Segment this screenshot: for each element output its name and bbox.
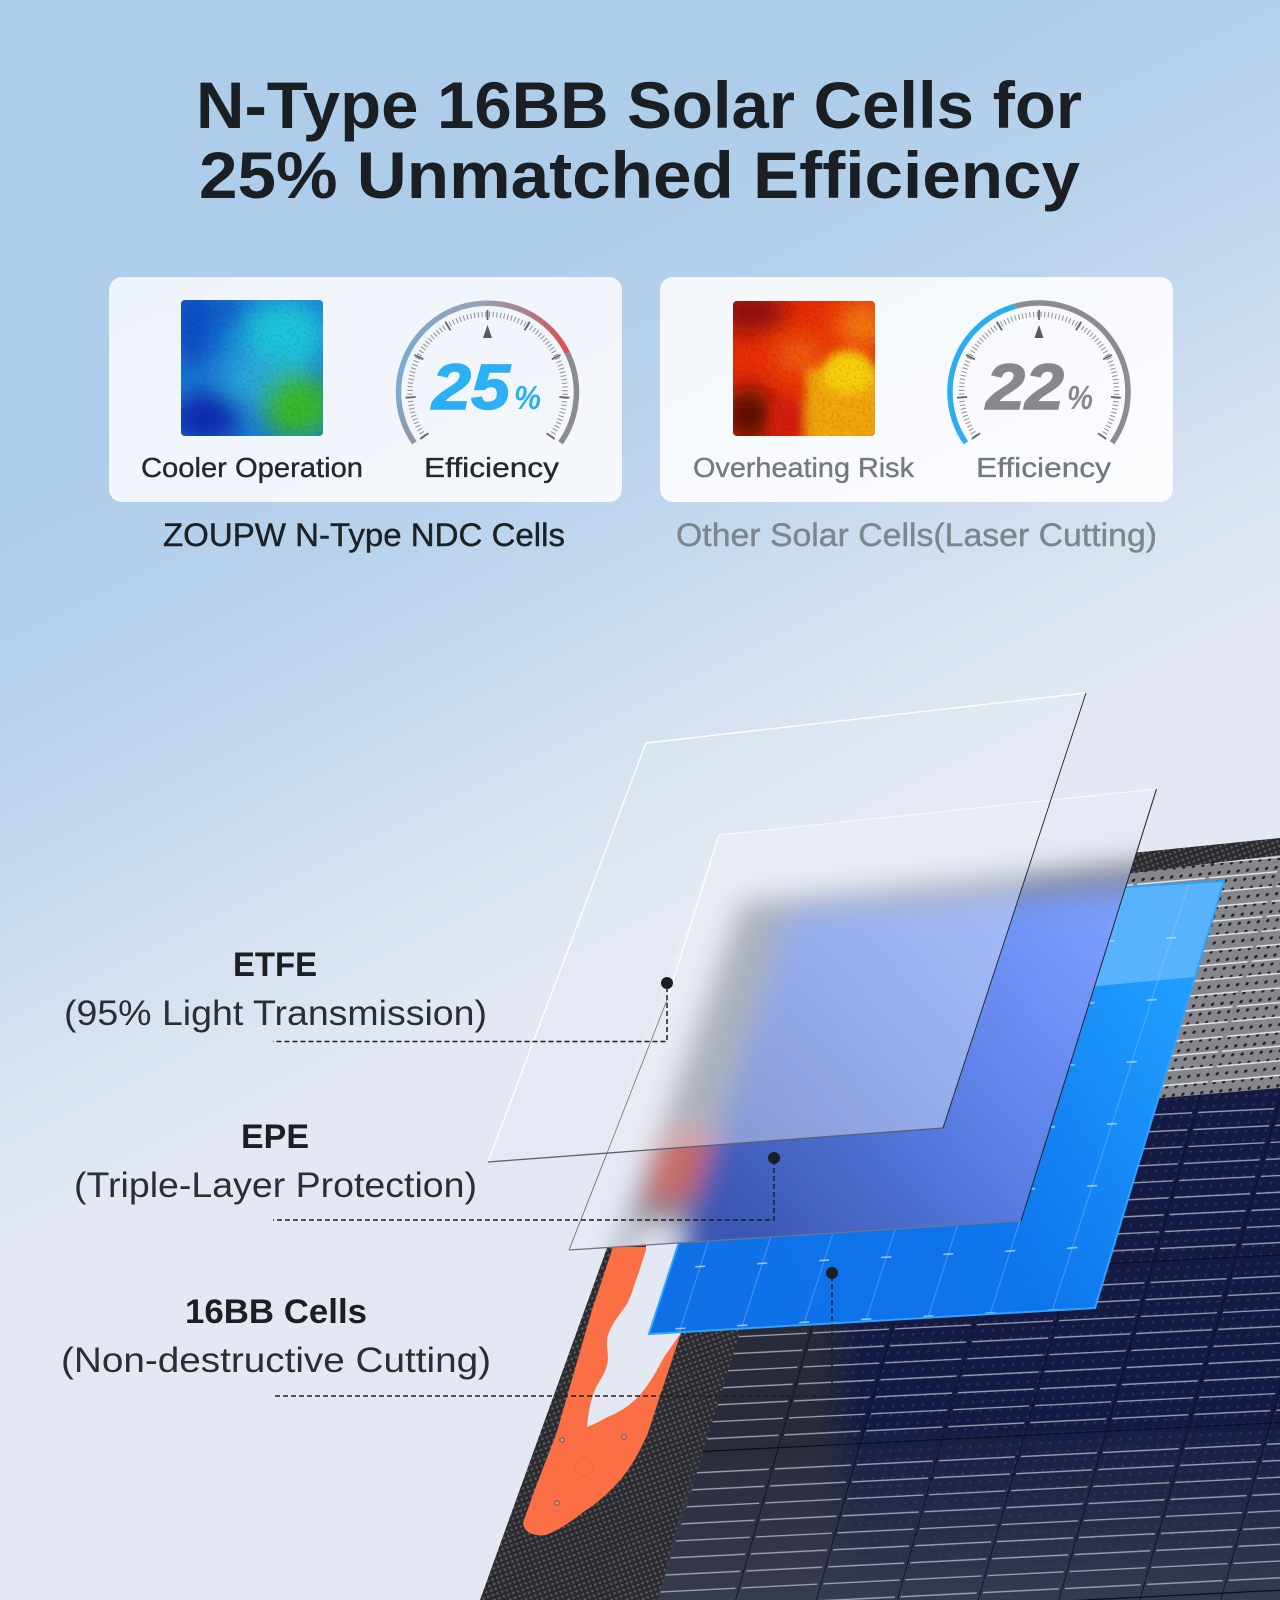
caption: ZOUPW cells: ZOUPW N-Type NDC Cells: [163, 517, 565, 553]
gauge: 25 percent: [398, 303, 576, 443]
title: N-Type 16BB Solar Cells for: [196, 68, 1082, 142]
handle rivets: [555, 1435, 626, 1505]
title: 25% Unmatched Efficiency: [199, 138, 1080, 212]
label text: (95% Light Transmission): [64, 994, 487, 1033]
title: [196, 68, 1082, 212]
label text: 16BB Cells: [185, 1293, 367, 1331]
label: efficiency: Efficiency: [976, 452, 1111, 483]
card background: [109, 277, 622, 502]
callout: ETFE: [64, 946, 673, 1042]
label: cooler operation: Cooler Operation: [141, 452, 363, 483]
gauge: 22 percent: [950, 303, 1128, 443]
label text: ETFE: [233, 946, 317, 984]
ETFE glass layer: [488, 693, 1086, 1162]
handle logo: [575, 1458, 593, 1476]
leader line: [273, 1276, 832, 1396]
panel: ZOUPW N-Type NDC cells: [109, 277, 622, 502]
panel: other solar cells: [660, 277, 1173, 502]
label: efficiency: Efficiency: [424, 452, 559, 483]
label text: (Triple-Layer Protection): [74, 1166, 477, 1205]
label text: [61, 1293, 491, 1380]
panel fabric border: [480, 838, 1280, 1600]
leader line: [273, 987, 667, 1042]
card background: [660, 277, 1173, 502]
caption: other cells: Other Solar Cells(Laser Cutting): [676, 517, 1157, 553]
anchor dot: [826, 1267, 838, 1279]
solar panel: [480, 838, 1280, 1600]
grey perforated cell area: [800, 855, 1280, 1135]
anchor dot: [768, 1152, 780, 1164]
orange handle: [523, 1247, 700, 1535]
gauge: 22 percent: 22: [985, 351, 1064, 423]
thermal image: overheating risk: [733, 301, 875, 436]
EPE glass layer: [568, 788, 1157, 1251]
callout: EPE: [74, 1118, 780, 1220]
blue solar cell layer: [649, 881, 1224, 1334]
label text: [74, 1118, 477, 1205]
navy cell area: [658, 1088, 1280, 1600]
gauge: 25 percent: 25: [431, 351, 512, 423]
gauge: 25 percent: %: [514, 379, 541, 416]
gauge: 22 percent: %: [1067, 379, 1093, 416]
thermal image: cooler operation: [181, 300, 323, 436]
EPE edges: [719, 789, 1156, 835]
anchor dot: [661, 977, 673, 989]
label text: EPE: [241, 1118, 309, 1156]
callout: 16BB cells: [61, 1267, 838, 1396]
label text: (Non-destructive Cutting): [61, 1341, 491, 1380]
handle cut-out: [587, 1240, 700, 1427]
leader line: [273, 1160, 774, 1220]
label: overheating risk: Overheating Risk: [693, 452, 915, 483]
label text: [64, 946, 487, 1033]
